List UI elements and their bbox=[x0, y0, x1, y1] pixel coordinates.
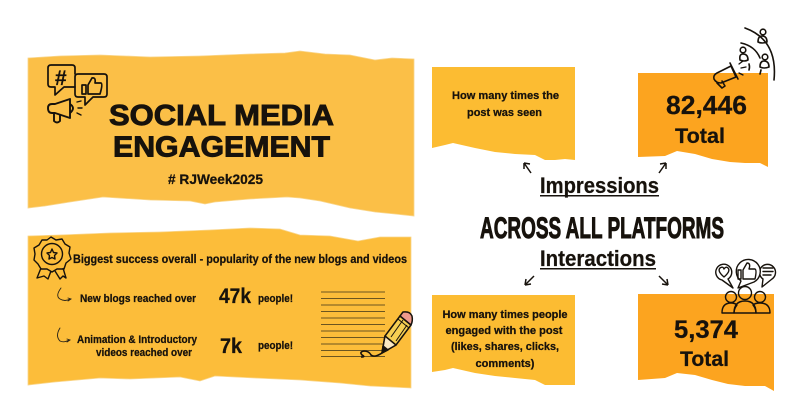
torn yellow paper bbox=[432, 295, 575, 385]
text: Interactions bbox=[540, 246, 656, 271]
text: new blogs: New blogs reached over bbox=[80, 293, 197, 305]
panel: social media engagement title bbox=[28, 51, 414, 216]
icon: pencil bbox=[361, 312, 412, 357]
text: animation videos: Animation & Introductory bbox=[77, 334, 198, 346]
arrow: interactions right bbox=[659, 276, 668, 285]
panel: impressions total bbox=[638, 73, 768, 167]
ruled lines bbox=[321, 292, 385, 356]
text: engaged with the post bbox=[446, 325, 563, 337]
icon: people with reactions bbox=[716, 259, 775, 313]
headline: Biggest success overall - popularity of the new blogs and videos bbox=[73, 252, 407, 266]
arrow: impressions right bbox=[659, 163, 666, 173]
icon: award rosette bbox=[34, 237, 71, 279]
text: (likes, shares, clicks, bbox=[451, 341, 559, 353]
icon: megaphone and audience bbox=[714, 28, 774, 88]
hashtag line: # RJWeek2025 bbox=[168, 171, 263, 187]
arrow: interactions left bbox=[525, 276, 534, 285]
arrow: blogs bbox=[58, 288, 71, 301]
text: total: Total bbox=[675, 125, 725, 148]
heading: social media: SOCIAL MEDIA bbox=[109, 100, 334, 132]
text: animation videos: videos reached over bbox=[96, 347, 193, 359]
panel: interactions total bbox=[638, 294, 774, 391]
arrow: impressions left bbox=[524, 163, 531, 173]
text: total: Total bbox=[680, 348, 729, 371]
number: 5,374: 5,374 bbox=[674, 316, 738, 344]
interactions label bbox=[540, 246, 656, 271]
text: How many times the bbox=[452, 90, 559, 102]
text: Impressions bbox=[540, 173, 659, 198]
impressions label bbox=[540, 173, 659, 198]
torn orange paper bbox=[638, 294, 774, 391]
torn yellow paper bbox=[28, 228, 411, 388]
panel: impressions description bbox=[432, 67, 575, 160]
heading: engagement: ENGAGEMENT bbox=[113, 132, 331, 164]
number: 82,446: 82,446 bbox=[666, 90, 747, 120]
number: 47k: 47k bbox=[219, 285, 251, 308]
icon: hashtag, like and megaphone bbox=[48, 65, 107, 122]
number: 7k: 7k bbox=[220, 335, 242, 358]
text: people: people! bbox=[258, 293, 293, 305]
text: post was seen bbox=[467, 107, 542, 119]
torn yellow paper bbox=[28, 51, 414, 216]
torn yellow paper bbox=[432, 67, 575, 160]
panel: interactions description bbox=[432, 295, 575, 385]
text: comments) bbox=[476, 358, 535, 370]
arrow: videos bbox=[58, 328, 70, 342]
panel: biggest success bbox=[28, 228, 412, 388]
torn orange paper bbox=[638, 73, 768, 167]
text: people: people! bbox=[258, 340, 293, 352]
icon: hashtag, like and megaphone: # bbox=[55, 67, 67, 90]
text: How many times people bbox=[442, 309, 568, 321]
